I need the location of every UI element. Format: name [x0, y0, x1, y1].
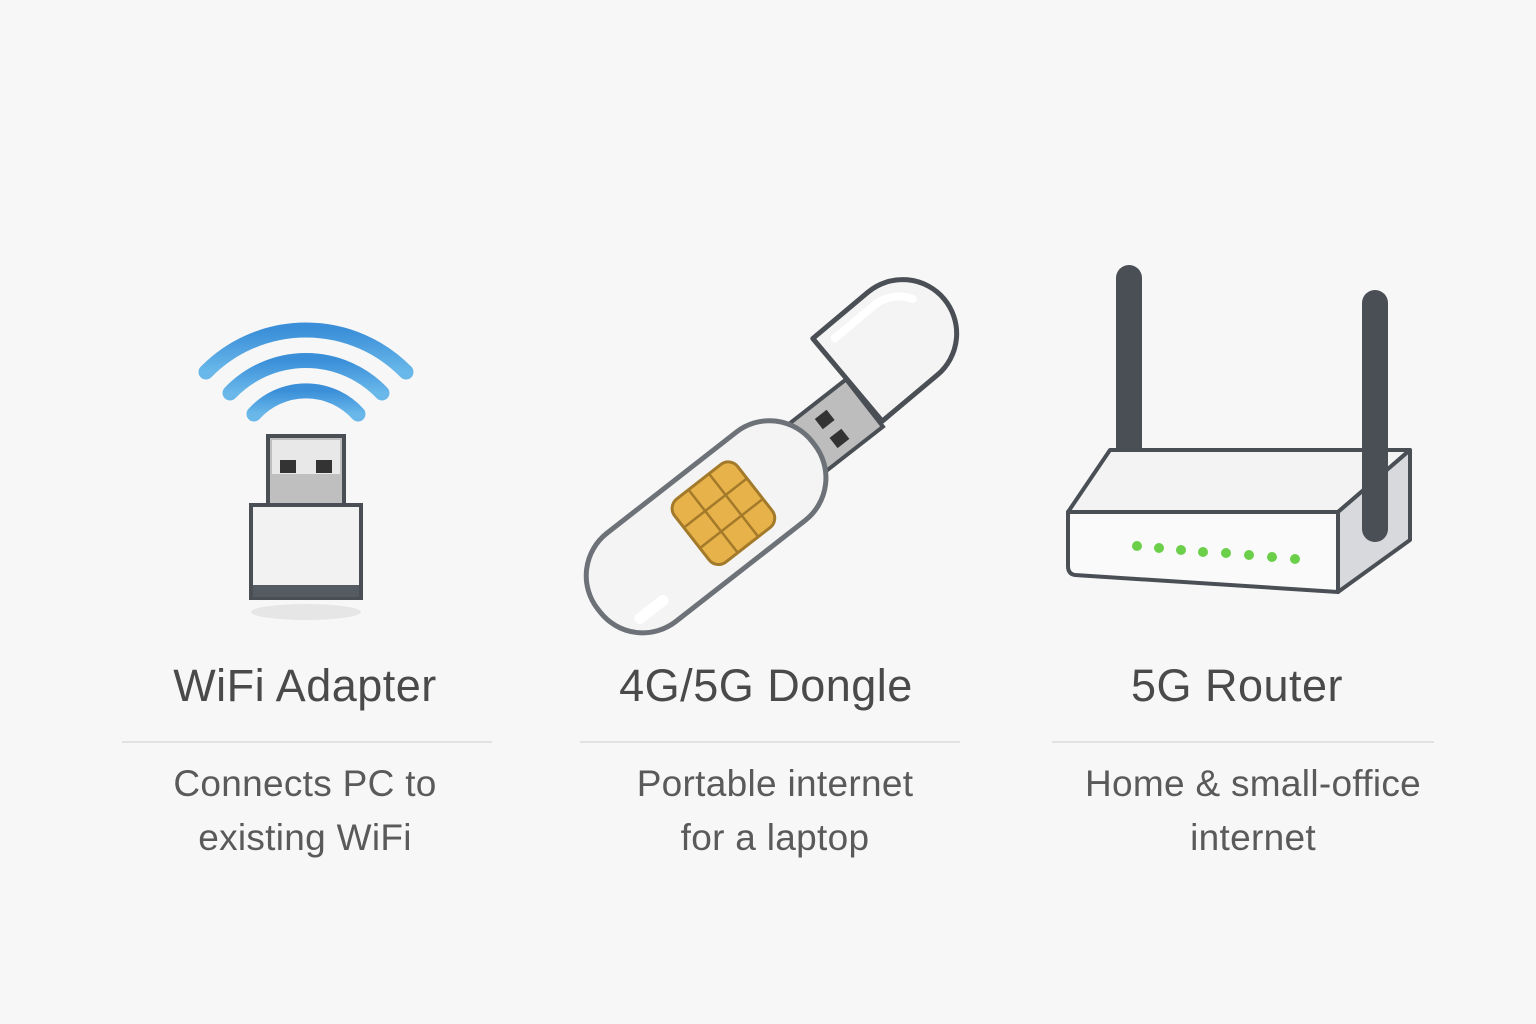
title: 5G Router: 5G Router — [1131, 660, 1343, 711]
text: router description: internet — [1190, 817, 1316, 858]
text: router description — [1085, 763, 1421, 858]
icon: 4G/5G dongle — [564, 257, 979, 655]
icon: 5G router — [1068, 265, 1410, 592]
text: dongle description: Portable internet — [637, 763, 913, 804]
icon: wifi signal — [206, 330, 406, 414]
icon: wifi adapter — [206, 330, 406, 620]
text: dongle description — [637, 763, 913, 858]
text: wifi adapter description: existing WiFi — [198, 817, 412, 858]
text: wifi adapter description — [173, 763, 437, 858]
title: WiFi Adapter: WiFi Adapter — [173, 660, 437, 711]
title: 4G/5G Dongle: 4G/5G Dongle — [619, 660, 913, 711]
text: dongle description: for a laptop — [681, 817, 869, 858]
text: wifi adapter description: Connects PC to — [173, 763, 437, 804]
text: router description: Home & small-office — [1085, 763, 1421, 804]
